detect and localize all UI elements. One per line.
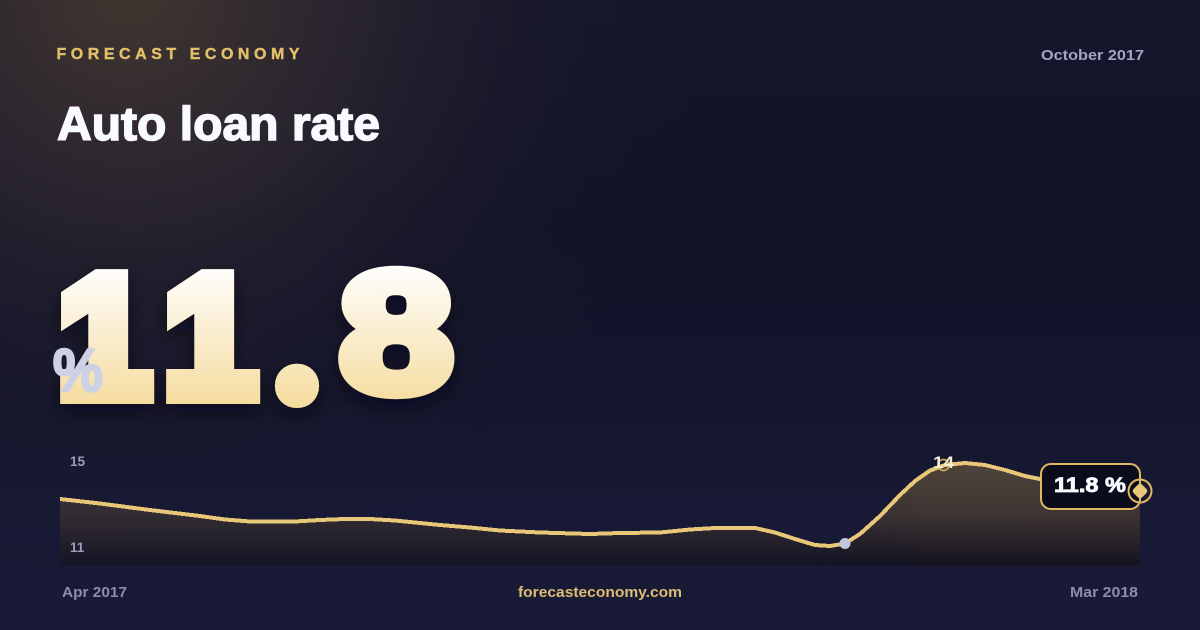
big value: . xyxy=(296,380,298,389)
big value xyxy=(58,237,453,432)
high point marker xyxy=(938,460,949,470)
current value callout xyxy=(1041,464,1140,509)
big value: 8 xyxy=(340,237,453,427)
low point marker xyxy=(840,538,850,549)
website: forecasteconomy.com xyxy=(518,584,682,601)
start date: Apr 2017 xyxy=(62,584,127,601)
big value: 1 xyxy=(164,241,256,432)
current value marker xyxy=(1128,480,1152,502)
trend line xyxy=(60,463,1045,546)
high point label: 14 xyxy=(933,453,955,472)
big value: 1 xyxy=(58,241,150,432)
y axis label 15: 15 xyxy=(70,454,86,469)
end date: Mar 2018 xyxy=(1070,584,1138,601)
line chart xyxy=(60,453,1152,565)
current value callout: 11.8 % xyxy=(1054,474,1126,497)
date: October 2017 xyxy=(1041,47,1144,64)
percent unit: % xyxy=(53,337,103,404)
brand label: FORECAST ECONOMY xyxy=(56,46,300,63)
y axis label 11: 11 xyxy=(70,540,85,555)
chart area fill xyxy=(60,463,1140,565)
title: Auto loan rate xyxy=(57,97,380,150)
